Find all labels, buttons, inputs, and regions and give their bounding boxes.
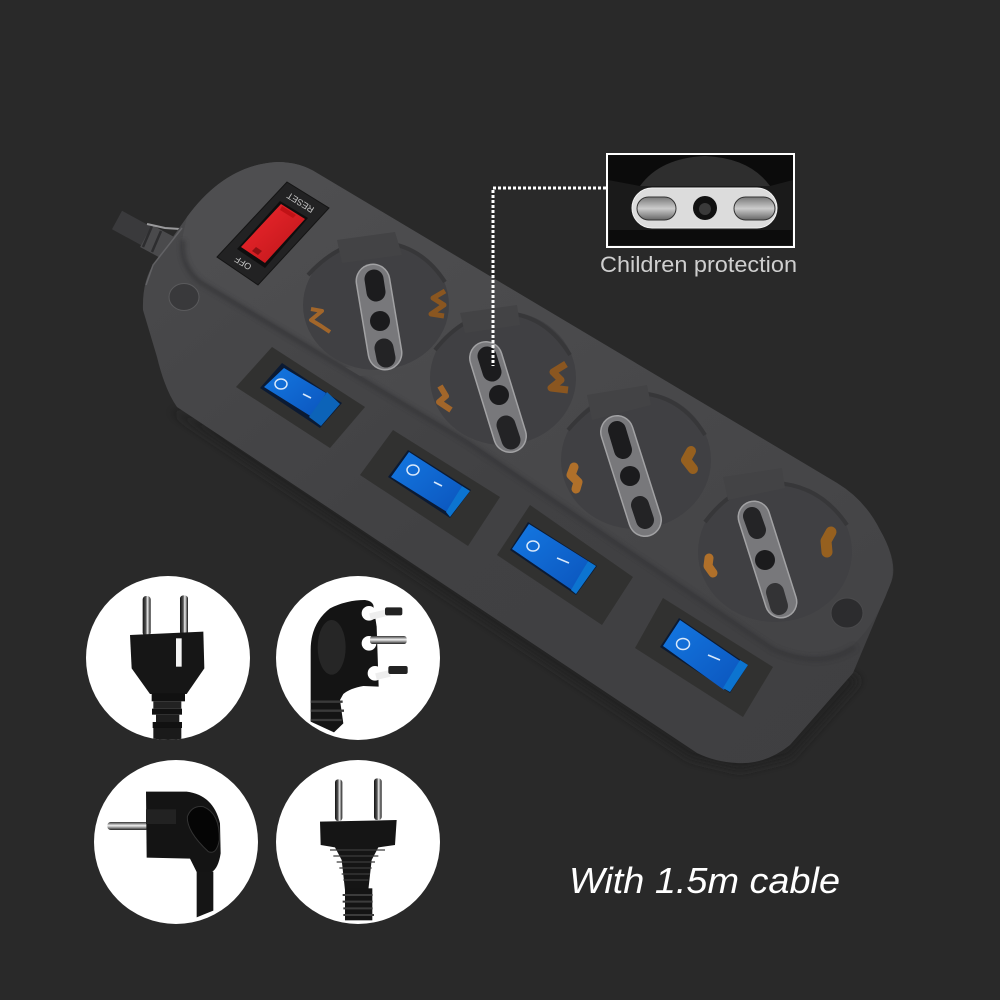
master switch bbox=[217, 182, 329, 285]
right mounting hole bbox=[831, 598, 863, 628]
master switch: RESET bbox=[285, 190, 316, 215]
master switch: OFF bbox=[232, 254, 253, 272]
power cable bbox=[117, 220, 180, 252]
strip shadow bbox=[170, 410, 860, 770]
strip body bbox=[143, 162, 893, 763]
caption: cable length: With 1.5m cable bbox=[569, 860, 840, 901]
plug circle 2 bbox=[276, 576, 440, 740]
dotted leader line bbox=[493, 188, 606, 366]
socket 1 bbox=[303, 232, 452, 376]
blue switch 2 bbox=[360, 430, 500, 546]
inset: children protection shutter bbox=[607, 154, 794, 247]
socket 3 bbox=[561, 385, 711, 529]
blue switch 4 bbox=[635, 598, 773, 717]
socket 4 bbox=[698, 468, 852, 622]
plug circle 3 bbox=[94, 760, 258, 924]
blue switch 3 bbox=[497, 505, 633, 625]
plug circle 1 bbox=[86, 576, 250, 740]
inset caption: Children protection bbox=[600, 252, 797, 277]
plug circle 4 bbox=[276, 760, 440, 924]
socket 2 bbox=[430, 305, 576, 445]
power strip bbox=[117, 162, 893, 763]
strip top face bbox=[182, 162, 892, 657]
blue switch 1 bbox=[236, 347, 365, 448]
left mounting hole bbox=[169, 284, 199, 310]
